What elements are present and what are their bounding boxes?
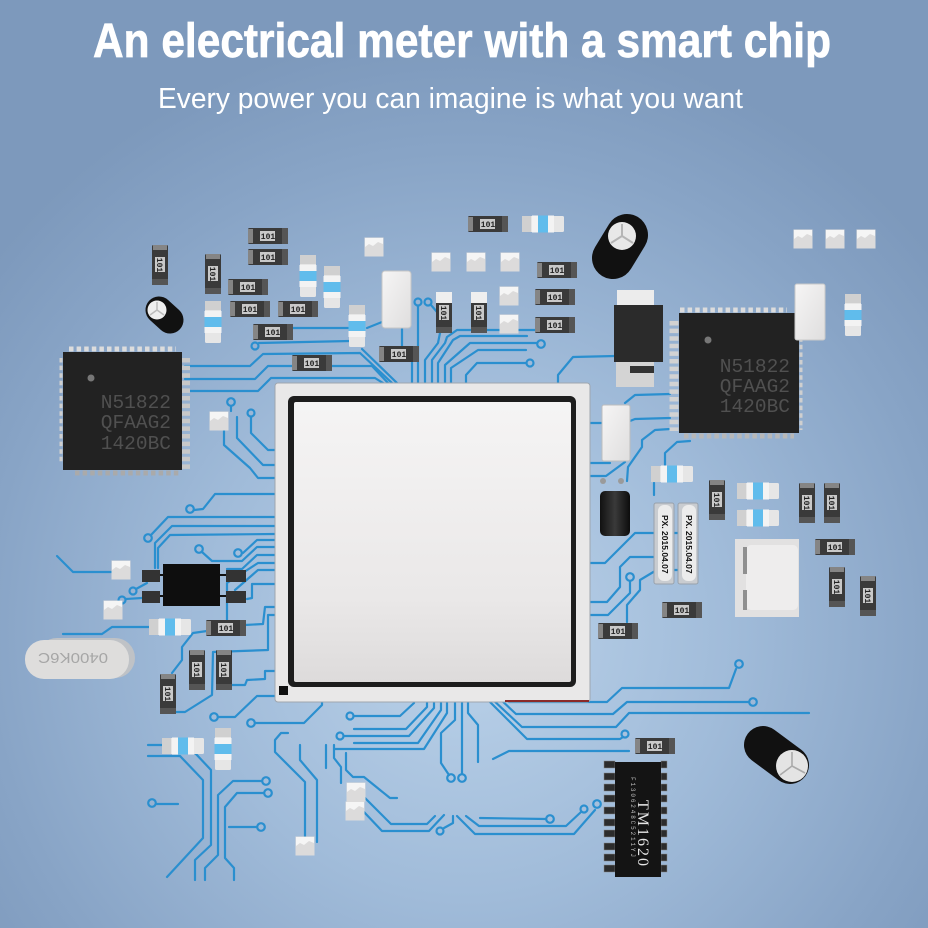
SMD resistors: 101 (191, 663, 200, 677)
left QFN chip: 1420BC (101, 433, 171, 455)
right QFN chip (674, 310, 801, 436)
white and blue capacitors (149, 216, 862, 770)
oscillator can: 0400K6C (38, 649, 108, 666)
SMD resistors: 101 (711, 493, 720, 507)
SMD resistors: 101 (611, 628, 625, 637)
SMD resistors: 101 (261, 233, 275, 242)
title: An electrical meter with a smart chip (93, 15, 831, 68)
SMD resistors: 101 (207, 267, 216, 281)
white block components (382, 271, 825, 461)
SMD resistors: 101 (548, 294, 562, 303)
left QFN chip: N51822 (101, 392, 171, 414)
main chip (275, 383, 590, 702)
SMD resistors: 101 (291, 306, 305, 315)
quartz crystals (654, 503, 698, 584)
SMD resistors: 101 (801, 496, 810, 510)
SMD resistors: 101 (473, 306, 482, 320)
vertical capacitor (600, 491, 630, 536)
SMD resistors: 101 (305, 360, 319, 369)
SMD resistors: 101 (548, 322, 562, 331)
left QFN chip (61, 349, 186, 473)
quartz crystals: PX. 2015.04.07 (684, 515, 694, 574)
SMD resistors: 101 (392, 351, 406, 360)
small black IC (142, 564, 246, 606)
TM1620 chip: F1306248C5211YJ (629, 777, 636, 857)
electrolytic capacitor bottom right (763, 745, 808, 782)
SMD resistors: 101 (826, 496, 835, 510)
SMD resistors: 101 (438, 306, 447, 320)
white pads (104, 230, 876, 856)
SMD resistors: 101 (481, 221, 495, 230)
SMD resistors: 101 (831, 580, 840, 594)
SMD resistors: 101 (243, 306, 257, 315)
SMD resistors: 101 (266, 329, 280, 338)
power transistor (614, 290, 663, 387)
circuit traces (57, 298, 809, 880)
SMD resistors: 101 (261, 254, 275, 263)
electrolytic capacitor small (148, 300, 170, 320)
SMD resistors (152, 216, 876, 754)
quartz crystals: PX. 2015.04.07 (660, 515, 670, 574)
SMD resistors: 101 (675, 607, 689, 616)
TM1620 chip (604, 761, 667, 877)
small pins (600, 478, 624, 484)
SMD resistors: 101 (162, 687, 171, 701)
SMD resistors: 101 (154, 258, 163, 272)
SMD resistors: 101 (218, 663, 227, 677)
SMD resistors: 101 (241, 284, 255, 293)
SMD resistors: 101 (219, 625, 233, 634)
SMD resistors: 101 (648, 743, 662, 752)
right QFN chip: QFAAG2 (720, 376, 790, 398)
left QFN chip: QFAAG2 (101, 412, 171, 434)
large white module (735, 539, 799, 617)
subtitle: Every power you can imagine is what you want (158, 83, 743, 115)
oscillator can (25, 638, 135, 679)
electrolytic capacitor top (608, 222, 636, 258)
SMD resistors: 101 (862, 589, 871, 603)
SMD resistors: 101 (828, 544, 842, 553)
SMD resistors: 101 (550, 267, 564, 276)
TM1620 chip: TM1620 (634, 800, 651, 866)
right QFN chip: N51822 (720, 356, 790, 378)
right QFN chip: 1420BC (720, 396, 790, 418)
